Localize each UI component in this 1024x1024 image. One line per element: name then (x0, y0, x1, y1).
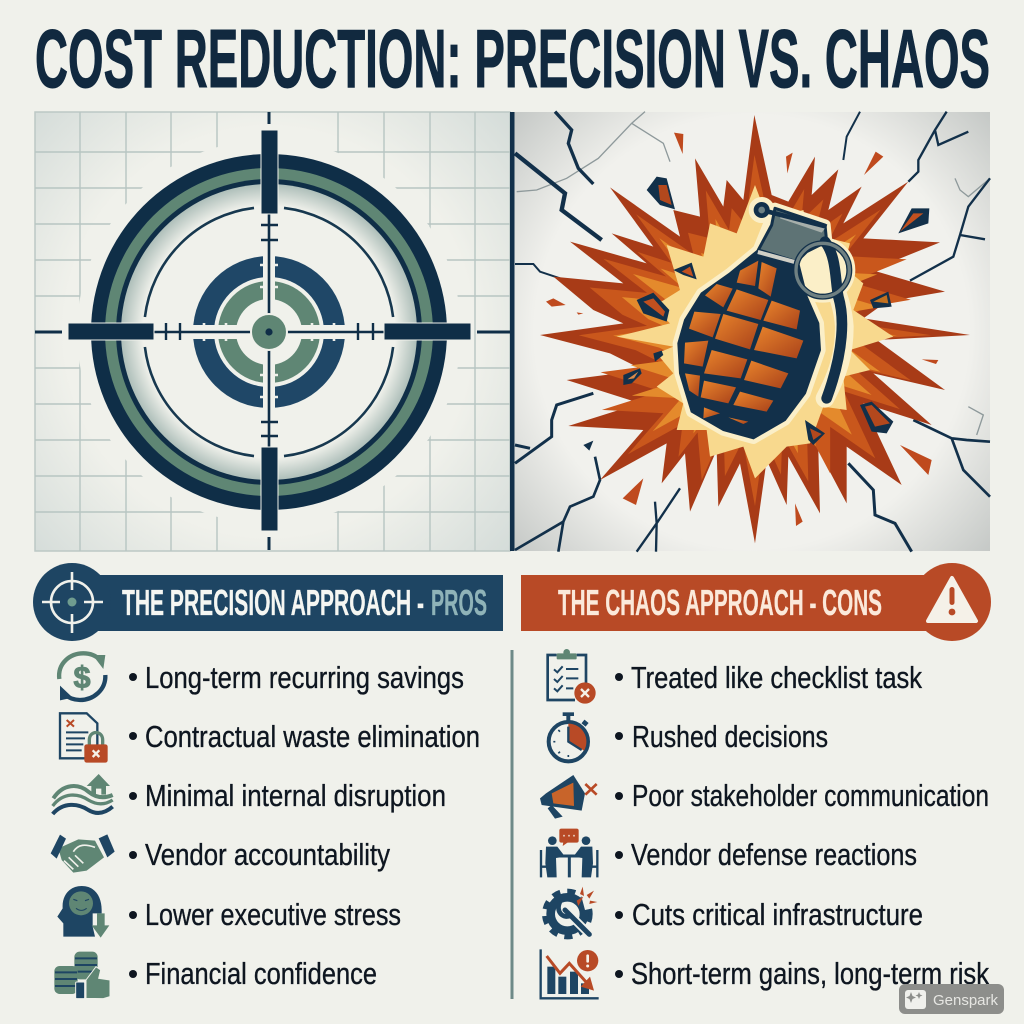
header: precision approach pros (33, 563, 503, 641)
center dot (251, 314, 287, 350)
icon: warning triangle (928, 578, 976, 621)
icon: calm head with down arrow (57, 886, 109, 938)
header circle (913, 563, 991, 641)
icon: sparkle tile (905, 990, 926, 1009)
row: long-term recurring savings: Long-term recurring savings (145, 660, 464, 695)
watermark badge (899, 984, 1004, 1014)
header bar (60, 575, 503, 631)
watermark text: Genspark (933, 993, 999, 1009)
row: vendor defense reactions: Vendor defense reactions (631, 837, 917, 872)
icon: clipboard (548, 649, 596, 704)
row: rushed decisions: Rushed decisions (632, 719, 828, 754)
row: short-term gains long-term risk (541, 949, 989, 998)
icon: document with lock (60, 713, 108, 763)
header accent PROS: PROS (431, 582, 487, 623)
row: contractual waste elimination: Contractual waste elimination (145, 719, 480, 754)
grenade body (678, 250, 820, 438)
header circle (33, 563, 111, 641)
row: treated like checklist task (548, 649, 922, 704)
list: pros (51, 653, 480, 999)
icon: recurring dollar (59, 653, 105, 700)
row: rushed decisions (549, 712, 828, 761)
safety lever (825, 242, 842, 398)
debris (546, 133, 938, 526)
icon: meeting with speech bubble (541, 829, 597, 877)
panel divider (510, 112, 514, 551)
row: poor stakeholder communication (540, 775, 989, 819)
icon: coins and thumbs up (54, 952, 110, 999)
icon: crosshair (42, 572, 103, 633)
grenade collar (757, 250, 797, 265)
column divider (510, 650, 514, 999)
row: minimal internal disruption (53, 774, 446, 814)
explosion burst (540, 115, 970, 543)
grenade fragmentation cells (684, 261, 803, 424)
header bar (521, 575, 956, 631)
icon: megaphone (540, 775, 597, 819)
icon: handshake (51, 834, 115, 873)
pull ring (796, 243, 849, 297)
cracked wall background (513, 112, 990, 551)
icon: stopwatch (549, 712, 589, 761)
lever knob (754, 202, 827, 227)
row: financial confidence: Financial confidence (145, 956, 377, 991)
grenade (678, 202, 852, 438)
header: chaos approach cons (521, 563, 991, 641)
crosshair (35, 112, 510, 550)
row: contractual waste elimination (60, 713, 480, 763)
neck highlight (780, 213, 825, 233)
panel: chaos grenade illustration (510, 112, 990, 552)
grenade neck (758, 208, 827, 262)
bullseye rings (187, 250, 351, 414)
icon: recurring dollar: $ (73, 661, 91, 695)
row: lower executive stress: Lower executive stress (145, 897, 401, 932)
outer scope ring (91, 154, 447, 510)
row: vendor accountability: Vendor accountability (145, 837, 390, 872)
panel: precision target illustration (35, 112, 510, 551)
row: vendor accountability (51, 834, 390, 873)
row: minimal internal disruption: Minimal internal disruption (145, 778, 446, 813)
row: cuts critical infrastructure (545, 885, 923, 936)
grenade halo (678, 202, 852, 438)
row: vendor defense reactions (541, 829, 917, 877)
icon: gear and wrench (545, 885, 600, 936)
header text: THE PRECISION APPROACH - (122, 582, 424, 623)
row: treated like checklist task: Treated like checklist task (631, 660, 922, 695)
thin inner arcs (145, 208, 393, 456)
ring interior highlight (805, 257, 835, 295)
row: lower executive stress (57, 886, 401, 938)
row: cuts critical infrastructure: Cuts critical infrastructure (632, 897, 923, 932)
grid background (35, 112, 510, 551)
row: financial confidence (54, 952, 377, 999)
wall cracks (515, 112, 990, 552)
icon: waves and house (53, 774, 113, 814)
row: long-term recurring savings (59, 653, 464, 700)
list: cons (540, 649, 989, 998)
icon: falling chart (541, 949, 599, 998)
